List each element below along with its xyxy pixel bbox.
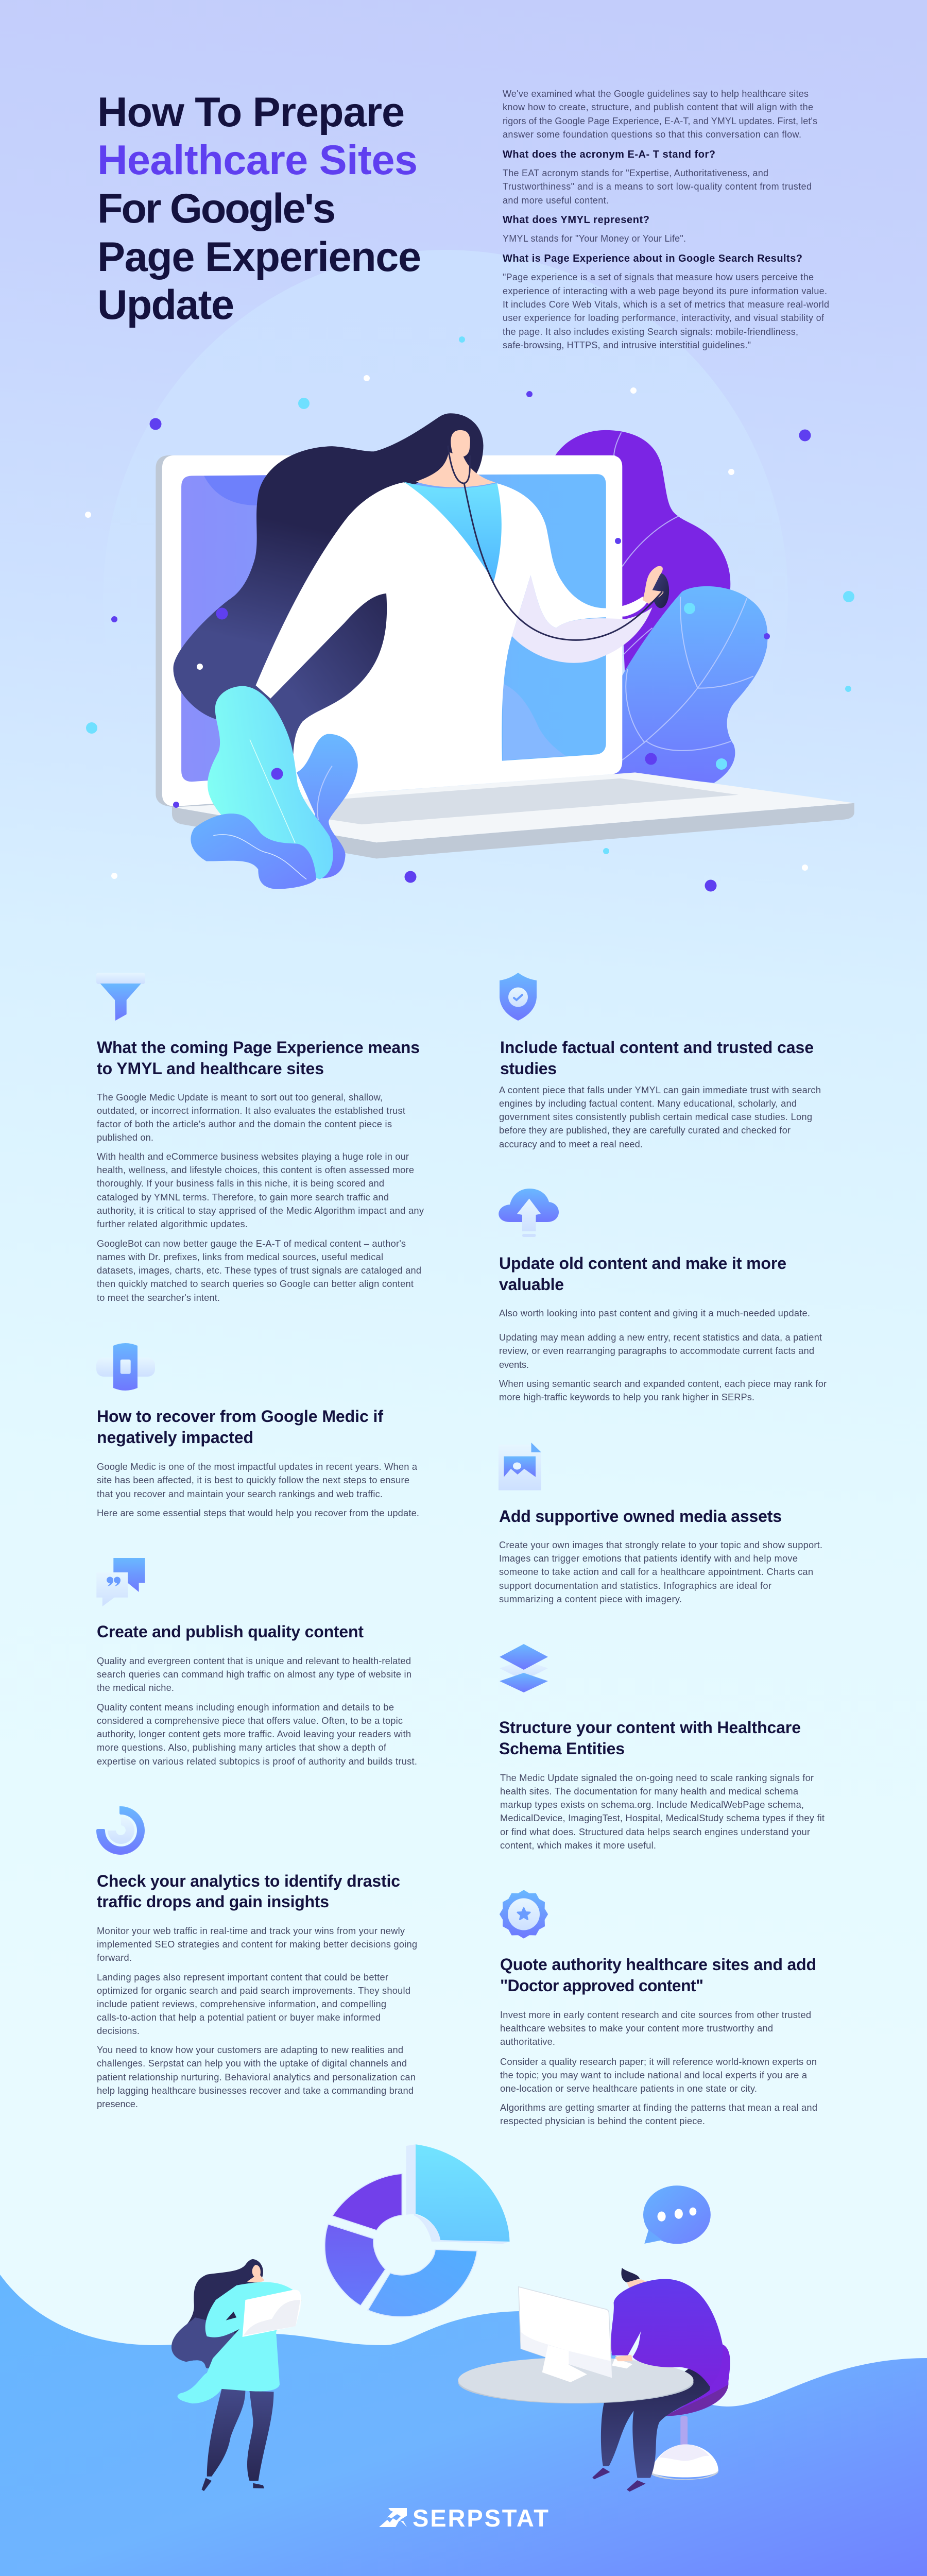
heading [97, 1038, 420, 1078]
hero illustration: doctor emerging from a laptop [156, 413, 854, 889]
body text: Updating may mean adding a new entry, recent statistics and data, a patient [499, 1332, 822, 1343]
body text: more questions. Also, publishing many articles that show a depth of [97, 1742, 387, 1753]
icon: speech bubbles [96, 1558, 145, 1606]
icon: image file [499, 1443, 541, 1490]
body text: respected physician is behind the content piece. [500, 2115, 705, 2126]
long hair [173, 413, 484, 768]
body text: authority, it is critical to stay apprised of the Medic Algorithm impact and any [97, 1205, 424, 1216]
blue leaf behind laptop [613, 586, 767, 783]
body text: datasets, images, charts, etc. These types of trust signals are cataloged and [97, 1265, 421, 1276]
body text: healthcare websites to make your content more trustworthy and [500, 2023, 773, 2033]
body text: Quality content means including enough information and details to be [97, 1702, 394, 1713]
body text: support documentation and statistics. Infographics are ideal for [499, 1580, 771, 1591]
pie chart [325, 2144, 510, 2317]
body text: Images can trigger emotions that patients identify with and help move [499, 1553, 798, 1564]
intro text block: What does the acronym E-A- T stand for? [503, 149, 715, 160]
laptop base [172, 772, 854, 858]
sleeve underside [512, 575, 653, 663]
heading: traffic drops and gain insights [97, 1892, 329, 1911]
body text: content, which makes it more useful. [500, 1840, 656, 1851]
purple leaf behind laptop [555, 430, 730, 682]
doctor figure [173, 413, 669, 801]
intro text block: The EAT acronym stands for "Expertise, Authoritativeness, and [503, 168, 768, 178]
intro text block: What is Page Experience about in Google Search Results? [503, 253, 802, 264]
body text: decisions. [97, 2025, 140, 2036]
title: Update [97, 282, 234, 328]
body text: MedicalDevice, ImagingTest, Hospital, MedicalStudy schema types if they fit [500, 1812, 825, 1823]
body text: Also worth looking into past content and giving it a much-needed update. [499, 1308, 810, 1318]
heading: Schema Entities [499, 1739, 625, 1758]
heading: Update old content and make it more [499, 1254, 786, 1273]
body text: health, wellness, and lifestyle choices, this content is often assessed more [97, 1164, 414, 1175]
body text: cataloged by YMNL terms. Therefore, to gain more search traffic and [97, 1192, 389, 1202]
body text: GoogleBot can now better gauge the E-A-T of medical content – author's [97, 1238, 406, 1249]
intro text block: Trustworthiness" and is a means to sort low-quality content from trusted [503, 181, 812, 192]
woman with tablet [171, 2259, 301, 2491]
body text: more high-traffic keywords to help you rank higher in SERPs. [499, 1392, 754, 1402]
panel: owned media assets [499, 1443, 822, 1604]
heading [499, 1254, 786, 1294]
logo mark [379, 2508, 407, 2527]
neck and face [416, 430, 495, 487]
icon: donut progress ring [96, 1806, 145, 1855]
laptop screen [156, 455, 622, 807]
panel: quote authority sites [500, 1891, 817, 2126]
body text [500, 1772, 825, 1851]
body text: forward. [97, 1952, 132, 1963]
body text: A content piece that falls under YMYL can gain immediate trust with search [499, 1084, 821, 1095]
intro text block: safe-browsing, HTTPS, and intrusive interstitial guidelines." [503, 340, 751, 350]
body text: implemented SEO strategies and content for making better decisions going [97, 1939, 417, 1950]
heading: Check your analytics to identify drastic [97, 1872, 400, 1890]
body text: presence. [97, 2098, 138, 2109]
body text: optimized for organic search and paid search improvements. They should [97, 1985, 410, 1996]
panel: recover from Google Medic [96, 1343, 419, 1518]
body text: Monitor your web traffic in real-time and track your wins from your newly [97, 1925, 405, 1936]
footer blue wave [0, 2275, 927, 2576]
intro text block: YMYL stands for "Your Money or Your Life". [503, 233, 686, 244]
intro text block: rigors of the Google Page Experience, E-A-T, and YMYL updates. First, let's [503, 116, 817, 126]
body text: Quality and evergreen content that is unique and relevant to health-related [97, 1655, 411, 1666]
intro text block: "Page experience is a set of signals that measure how users perceive the [503, 272, 814, 282]
white coat [256, 482, 647, 801]
heading: studies [500, 1059, 557, 1078]
panel: check analytics [96, 1806, 417, 2109]
heading: to YMYL and healthcare sites [97, 1059, 324, 1078]
body text: calls-to-action that help a potential patient or buyer make informed [97, 2012, 381, 2023]
intro text block: It includes Core Web Vitals, which is a set of metrics that measure real-world [503, 299, 829, 310]
intro text block: the page. It also includes existing Search signals: mobile-friendliness, [503, 327, 798, 337]
icon: medical cross [96, 1343, 155, 1391]
body text [97, 1461, 419, 1518]
body text: When using semantic search and expanded content, each piece may rank for [499, 1378, 827, 1389]
body text: considered a comprehensive piece that offers value. Often, to be a topic [97, 1715, 403, 1726]
body text: engines by including factual content. Many educational, scholarly, and [499, 1098, 797, 1109]
heading: "Doctor approved content" [500, 1976, 703, 1995]
body text: further related algorithmic updates. [97, 1218, 248, 1229]
heading [500, 1955, 816, 1995]
title: How To Prepare [97, 89, 405, 135]
body text: government sites consistently publish certain medical case studies. Long [499, 1111, 812, 1122]
body text: The Medic Update signaled the on-going need to scale ranking signals for [500, 1772, 814, 1783]
body text [97, 1655, 417, 1767]
intro text block: answer some foundation questions so that this conversation can flow. [503, 129, 801, 140]
body text: authority, longer content gets more traffic. Avoid leaving your readers with [97, 1728, 411, 1739]
body text: that you recover and maintain your search rankings and web traffic. [97, 1488, 383, 1499]
body text: or find what does. Structured data helps search engines understand your [500, 1826, 810, 1837]
hand and stethoscope bell [643, 566, 669, 608]
title: Page Experience [97, 234, 421, 280]
body text: Here are some essential steps that would help you recover from the update. [97, 1507, 419, 1518]
heading: Add supportive owned media assets [499, 1507, 782, 1526]
body text: someone to take action and call for a healthcare appointment. Charts can [499, 1566, 813, 1577]
body text: search queries can command high traffic on almost any type of website in [97, 1669, 411, 1680]
body text: Create your own images that strongly relate to your topic and show support. [499, 1539, 822, 1550]
body text: events. [499, 1359, 529, 1370]
background halo circle [103, 250, 788, 945]
icon: funnel [96, 973, 145, 1021]
body text: Invest more in early content research and cite sources from other trusted [500, 2009, 811, 2020]
panel: factual content [499, 973, 821, 1149]
body text: health sites. The documentation for many health and medical schema [500, 1786, 799, 1797]
intro text block: We've examined what the Google guidelines say to help healthcare sites [503, 89, 809, 99]
foreground low leaf [191, 814, 316, 889]
logo: Serpstat [379, 2504, 548, 2532]
body text: names with Dr. prefixes, links from medical sources, useful medical [97, 1251, 383, 1262]
heading [97, 1407, 383, 1447]
body text: authoritative. [500, 2036, 555, 2047]
icon: shield with check [500, 973, 537, 1021]
body text: Landing pages also represent important content that could be better [97, 1972, 388, 1982]
icon: stacked layers [500, 1644, 548, 1692]
foreground cyan plant [208, 686, 333, 879]
body text: review, or even rearranging paragraphs to accommodate current facts and [499, 1345, 814, 1356]
body text: Algorithms are getting smarter at finding the patterns that mean a real and [500, 2102, 817, 2113]
heading: Quote authority healthcare sites and add [500, 1955, 816, 1974]
body text: With health and eCommerce business websites playing a huge role in our [97, 1151, 409, 1162]
heading: Create and publish quality content [97, 1622, 364, 1641]
body text: thoroughly. If your business falls in this niche, it is being scored and [97, 1178, 384, 1189]
intro text block: user experience for loading performance, interactivity, and visual stability of [503, 313, 825, 323]
footer illustration [171, 2144, 730, 2492]
desktop monitor [519, 2287, 612, 2382]
icon: star badge [500, 1891, 547, 1938]
body text [499, 1539, 822, 1604]
heading: negatively impacted [97, 1428, 253, 1447]
body text: include patient reviews, comprehensive information, and compelling [97, 1998, 386, 2009]
heading: valuable [499, 1275, 564, 1294]
heading [499, 1718, 801, 1758]
title: Healthcare Sites [97, 137, 418, 183]
foreground blue plant [297, 734, 358, 878]
body text: You need to know how your customers are adapting to new realities and [97, 2044, 403, 2055]
stethoscope tube [448, 446, 662, 640]
intro text block: know how to create, structure, and publish content that will align with the [503, 102, 813, 112]
body text: The Google Medic Update is meant to sort out too general, shallow, [97, 1092, 383, 1103]
panel: healthcare schema [499, 1644, 825, 1851]
body text: patient relationship nurturing. Behavioral analytics and personalization can [97, 2072, 416, 2082]
body text: the medical niche. [97, 1682, 174, 1693]
body text: one-location or serve healthcare patients in one state or city. [500, 2083, 757, 2094]
body text [499, 1084, 821, 1149]
panel: what Page Experience means [96, 973, 424, 1303]
body text [500, 2009, 817, 2126]
body text: Consider a quality research paper; it will reference world-known experts on [500, 2056, 817, 2067]
heading [97, 1872, 400, 1911]
body text: the topic; you may want to include national and local experts if you are a [500, 2070, 808, 2080]
cyan shirt [404, 482, 502, 582]
body text [499, 1308, 827, 1402]
title [97, 89, 421, 328]
body text: accuracy and to meet a real need. [499, 1139, 643, 1149]
body text: outdated, or incorrect information. It also evaluates the established trust [97, 1105, 405, 1116]
body text: challenges. Serpstat can help you with the uptake of digital channels and [97, 2058, 407, 2069]
body text: then quickly matched to search queries so Google can better align content [97, 1278, 414, 1289]
body text [97, 1925, 417, 2109]
body text: published on. [97, 1132, 153, 1143]
panel: update old content [499, 1189, 827, 1402]
body text: summarizing a content piece with imagery. [499, 1594, 682, 1604]
icon: cloud upload [499, 1189, 559, 1237]
heading: What the coming Page Experience means [97, 1038, 420, 1057]
intro text block: and more useful content. [503, 195, 609, 206]
heading: Include factual content and trusted case [500, 1038, 814, 1057]
body text: to meet the searcher's intent. [97, 1292, 220, 1303]
man at desk on stool [458, 2268, 730, 2492]
heading [500, 1038, 814, 1078]
logo wordmark: SERPSTAT [413, 2504, 548, 2532]
intro text block: What does YMYL represent? [503, 214, 649, 226]
speech bubble [643, 2185, 711, 2244]
body text: before they are published, they are carefully curated and checked for [499, 1125, 791, 1136]
body text: factor of both the article's author and the domain the content piece is [97, 1118, 392, 1129]
heading: Structure your content with Healthcare [499, 1718, 801, 1737]
heading: How to recover from Google Medic if [97, 1407, 383, 1426]
title: For Google's [97, 185, 336, 232]
body text: Google Medic is one of the most impactful updates in recent years. When a [97, 1461, 418, 1472]
floating dots [85, 336, 854, 891]
body text: markup types exists on schema.org. Include MedicalWebPage schema, [500, 1799, 804, 1810]
body text [97, 1092, 424, 1303]
intro text block: experience of interacting with a web page beyond its pure information value. [503, 286, 827, 296]
panel: create quality content [96, 1558, 417, 1767]
body text: help lagging healthcare businesses recover and take a commanding brand [97, 2085, 414, 2096]
body text: expertise on various related subtopics is proof of authority and builds trust. [97, 1756, 417, 1767]
intro text block [503, 89, 829, 350]
body text: site has been affected, it is best to quickly follow the next steps to ensure [97, 1475, 409, 1485]
